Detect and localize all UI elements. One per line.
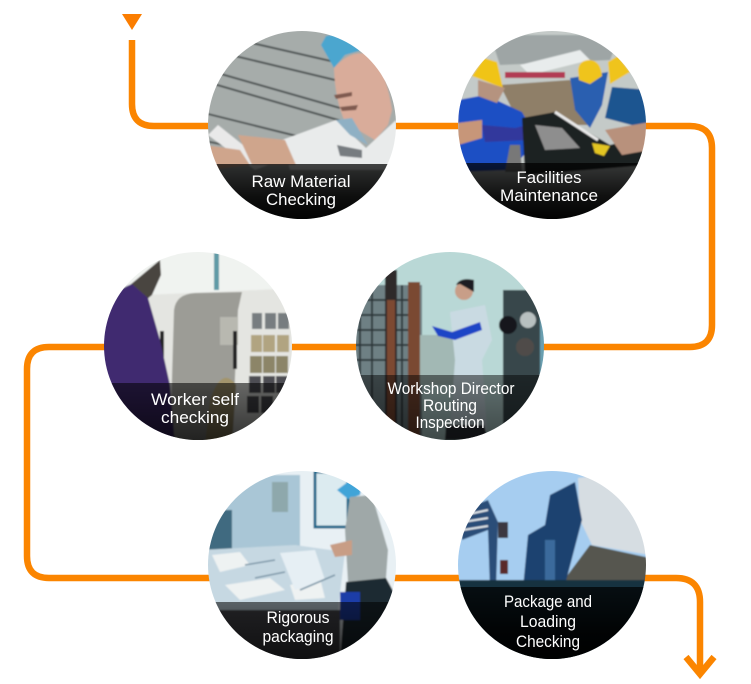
end arrow head bbox=[686, 657, 714, 674]
caption text: Raw Material bbox=[252, 172, 350, 191]
step 5: Rigorous packaging bbox=[208, 471, 396, 659]
caption band bbox=[112, 383, 284, 440]
photo: director with folder bbox=[356, 252, 544, 440]
caption band bbox=[216, 602, 388, 659]
photo: worker at machine bbox=[104, 252, 292, 440]
step 2: Facilities Maintenance: Maintenance bbox=[500, 186, 598, 205]
step 4: Workshop Director Routing Inspection: Routing bbox=[423, 396, 477, 415]
step 1: Raw Material Checking: Checking bbox=[266, 190, 336, 209]
caption text: Workshop Director bbox=[388, 379, 515, 398]
step 1: Raw Material Checking bbox=[208, 31, 396, 219]
caption text: Facilities bbox=[516, 168, 582, 187]
caption text: Package and bbox=[504, 592, 592, 611]
caption band bbox=[466, 163, 638, 219]
caption text: Rigorous bbox=[266, 608, 330, 627]
caption text: Worker self bbox=[151, 390, 239, 409]
start marker triangle bbox=[122, 14, 142, 30]
photo: forklift loading pallets bbox=[458, 471, 646, 659]
step 2: Facilities Maintenance bbox=[458, 31, 646, 219]
caption band bbox=[216, 164, 388, 219]
step 5: Rigorous packaging: packaging bbox=[262, 627, 334, 646]
photo: worker packaging parts bbox=[208, 471, 396, 659]
step 3: Worker self checking: checking bbox=[161, 408, 229, 427]
step 4: Workshop Director Routing Inspection bbox=[356, 252, 544, 440]
step 4: Workshop Director Routing Inspection: Inspection bbox=[416, 413, 484, 432]
caption band bbox=[460, 587, 644, 659]
caption band bbox=[360, 375, 540, 440]
step 6: Package and Loading Checking: Loading bbox=[520, 612, 576, 631]
photo: engineers in hard hats bbox=[458, 31, 646, 219]
step 6: Package and Loading Checking: Checking bbox=[516, 632, 580, 651]
step 3: Worker self checking bbox=[104, 252, 292, 440]
photo: worker at raw material bbox=[208, 31, 396, 219]
step 6: Package and Loading Checking bbox=[458, 471, 646, 659]
